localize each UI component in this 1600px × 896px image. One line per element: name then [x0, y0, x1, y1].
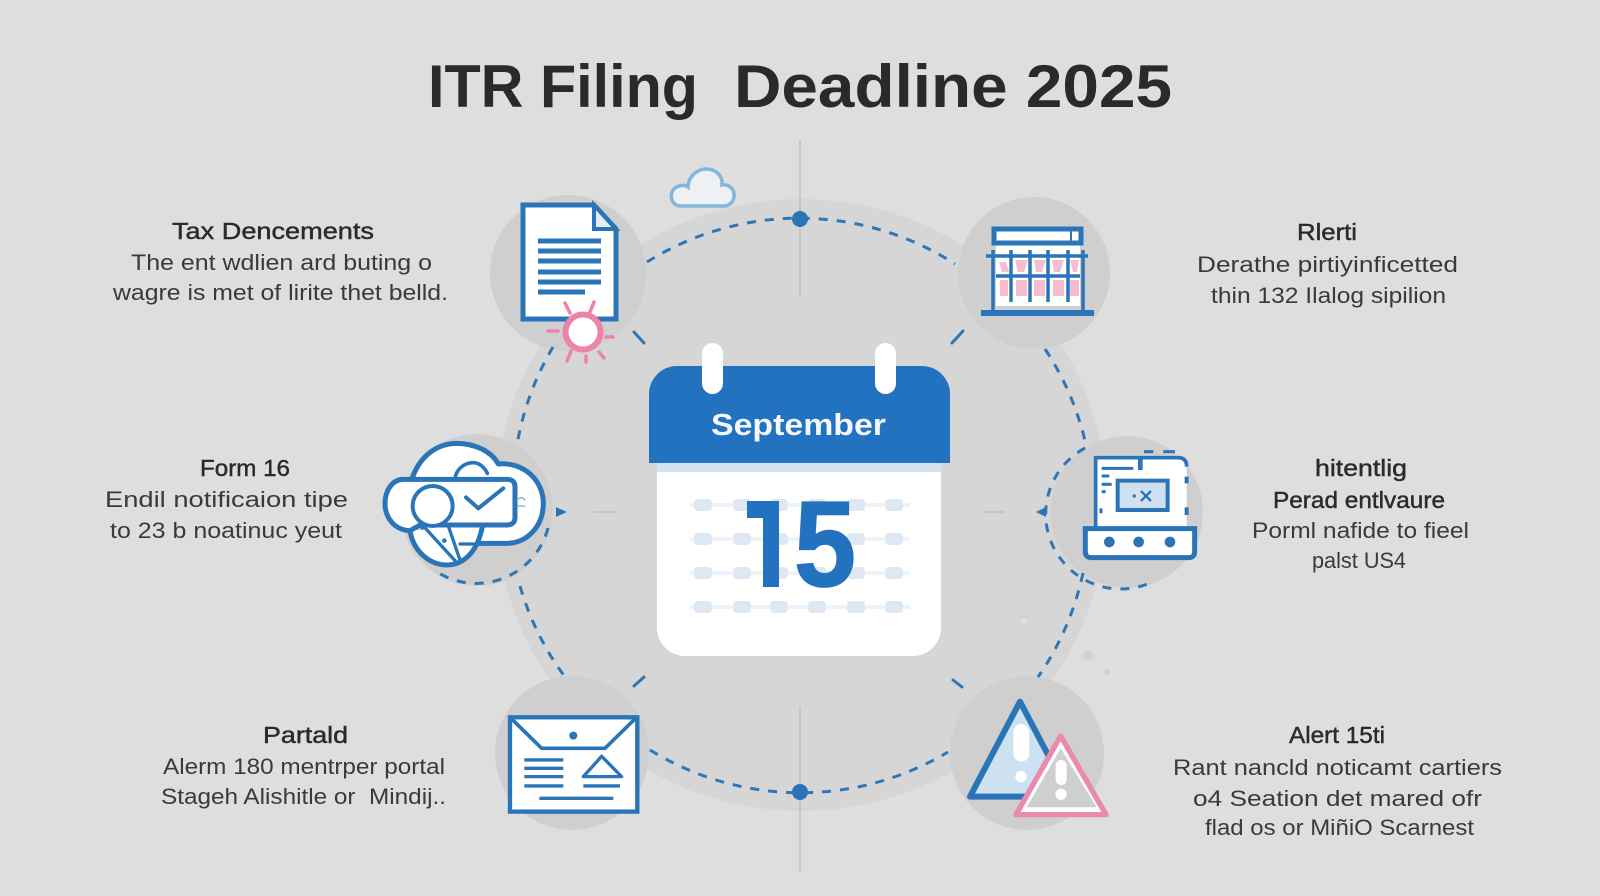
- text block: form 16: to 23 b noatinuc yeut: [110, 518, 343, 543]
- text block: middle right: [1252, 455, 1469, 573]
- title: [428, 53, 1172, 120]
- calendar page: [657, 460, 941, 656]
- text block: top right: Rlerti: [1297, 219, 1357, 245]
- text block: form 16: [105, 455, 348, 543]
- central background disc: [495, 199, 1107, 811]
- text block: bottom right: [1173, 722, 1502, 840]
- text block: top right: Derathe pirtiyinficetted: [1197, 252, 1458, 277]
- date number: [747, 501, 854, 588]
- text block: portal: Partald: [263, 722, 348, 748]
- icon: small cloud: [671, 169, 734, 206]
- text block: portal: [161, 722, 446, 809]
- icon: pink sun: [548, 302, 613, 362]
- faint speckles: [1022, 618, 1110, 675]
- text block: bottom right: flad os or MiñiO Scarnest: [1205, 815, 1475, 840]
- text block: portal: Alerm 180 mentrper portal: [163, 754, 445, 779]
- text block: form 16: Endil notificaion tipe: [105, 487, 348, 512]
- icon: envelope: [510, 717, 637, 812]
- text block: middle right: palst US4: [1312, 548, 1406, 573]
- month label: September: [711, 407, 886, 442]
- text block: top right: [1197, 219, 1458, 308]
- text block: form 16: Form 16: [200, 455, 290, 481]
- calendar date grid: [690, 499, 910, 613]
- text block: tax documents: The ent wdlien ard buting o: [131, 250, 432, 275]
- text block: tax documents: wagre is met of lirite thet belld.: [112, 280, 448, 305]
- text block: middle right: Porml nafide to fieel: [1252, 518, 1469, 543]
- icon: laptop window: [1085, 452, 1195, 558]
- text block: tax documents: Tax Dencements: [172, 218, 374, 244]
- arrow: left pointer: [556, 507, 567, 517]
- text block: bottom right: o4 Seation det mared ofr: [1193, 786, 1483, 811]
- text block: middle right: hitentlig: [1315, 455, 1407, 481]
- icon: warning triangles: [970, 702, 1106, 815]
- text block: bottom right: Alert 15ti: [1289, 722, 1385, 748]
- text block: middle right: Perad entlvaure: [1273, 487, 1445, 513]
- text block: top right: thin 132 Ilalog sipilion: [1211, 283, 1446, 308]
- title: ITR Filing: [428, 53, 698, 120]
- date number: 5: [794, 476, 856, 612]
- calendar: [649, 343, 950, 656]
- satellite discs: [401, 195, 1203, 830]
- arrow: right pointer: [1036, 507, 1046, 517]
- date number: 1: [735, 477, 803, 613]
- calendar header: [649, 366, 950, 463]
- calendar rings: [702, 343, 896, 394]
- icon: calendar table: [981, 229, 1094, 316]
- text block: portal: Stageh Alishitle or Mindij..: [161, 784, 446, 809]
- title: Deadline 2025: [734, 53, 1172, 120]
- icon: cloud with magnifier and check: [385, 443, 543, 565]
- text block: tax documents: [112, 218, 448, 305]
- vertical guide lines: [593, 140, 1005, 872]
- dashed timeline ring: [437, 211, 1150, 800]
- text block: bottom right: Rant nancld noticamt cartiers: [1173, 755, 1502, 780]
- icon: document with sun: [523, 205, 616, 362]
